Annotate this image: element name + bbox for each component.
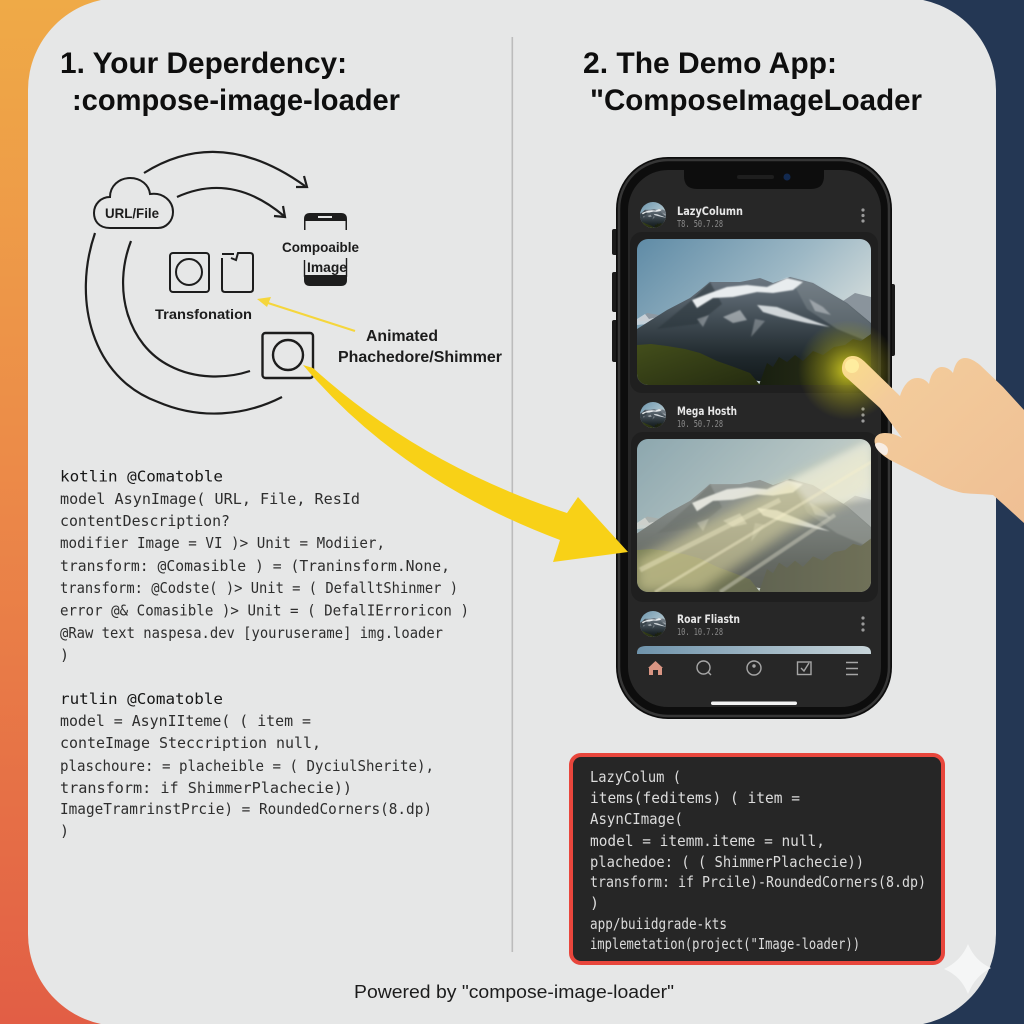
heading: the demo app: "ComposeImageLoader	[590, 84, 922, 117]
feed card 2 with shimmer	[631, 432, 878, 602]
feed row 2 header: Mega Hosth	[677, 404, 737, 418]
icon: phone composable image: Image	[307, 259, 347, 275]
arrow: big yellow	[303, 365, 628, 562]
code block: kotlin composable: modifier Image = VI )> Unit = Modiier,	[60, 534, 385, 552]
phone mockup	[612, 157, 895, 719]
icon: search	[697, 661, 711, 675]
code panel: lazy column: implemetation(project("Image-loader))	[590, 935, 860, 953]
icon: file	[222, 253, 253, 292]
icon: home	[648, 661, 663, 675]
code panel: lazy column: AsynCImage(	[590, 810, 683, 828]
code block: rutlin item: transform: if ShimmerPlachecie))	[60, 779, 352, 797]
avatar 2	[640, 402, 666, 428]
icon: check	[798, 662, 811, 674]
code block: rutlin item: model = AsynIIteme( ( item =	[60, 712, 311, 730]
code block: kotlin composable: model AsynImage( URL, File, ResId	[60, 490, 360, 508]
heading: your dependency	[60, 47, 400, 117]
icon: sparkle	[944, 944, 991, 994]
top curved arrow	[144, 152, 307, 187]
feed row 3 header: 10. 10.7.28	[677, 627, 723, 638]
inner return arc	[123, 241, 250, 376]
code panel: lazy column: LazyColum (	[590, 768, 681, 786]
code panel: lazy column: )	[590, 894, 599, 912]
code block: rutlin item: rutlin @Comatoble	[60, 690, 223, 708]
code block: rutlin item	[60, 690, 434, 840]
icon: placeholder square	[262, 333, 313, 378]
code block: kotlin composable: error @& Comasible )> Unit = ( DefalIErroricon )	[60, 602, 469, 620]
code panel: lazy column: transform: if Prcile)-RoundedCorners(8.dp)	[590, 873, 926, 891]
arrow: thin yellow	[257, 297, 355, 331]
fingertip highlight	[845, 359, 859, 373]
label: animated placeholder	[338, 328, 502, 366]
icon: phone composable image: Compoaible	[282, 239, 359, 255]
label: animated placeholder: Phachedore/Shimmer	[338, 349, 502, 366]
code block: rutlin item: conteImage Steccription null,	[60, 734, 321, 752]
code block: kotlin composable: transform: @Comasible ) = (Traninsform.None,	[60, 557, 450, 575]
label: animated placeholder: Animated	[366, 328, 438, 345]
diagram: dependency pipeline	[86, 152, 502, 414]
code block: kotlin composable: transform: @Codste( )> Unit = ( DefalltShinmer )	[60, 579, 458, 597]
feed row 1 header: LazyColumn	[677, 204, 743, 218]
icon: cloud with URL/File	[94, 178, 173, 228]
feed row 2 header	[640, 402, 865, 428]
code block: rutlin item: )	[60, 822, 69, 840]
feed row 2 header: 10. 50.7.28	[677, 419, 723, 430]
partial next image	[637, 646, 871, 654]
code block: kotlin composable: )	[60, 646, 69, 664]
phone screen	[628, 170, 881, 707]
code panel: lazy column: model = itemm.iteme = null,	[590, 832, 825, 850]
second curved arrow	[177, 188, 285, 217]
icon: cloud with URL/File: URL/File	[105, 205, 159, 221]
heading: the demo app	[583, 47, 922, 117]
tap glow	[802, 326, 890, 416]
thumb nail	[875, 443, 888, 455]
icon: compass	[747, 661, 761, 675]
code block: kotlin composable: kotlin @Comatoble	[60, 468, 223, 486]
feed card 1	[630, 232, 878, 393]
heading: your dependency: :compose-image-loader	[72, 84, 400, 117]
notch	[684, 168, 824, 189]
code block: kotlin composable	[60, 468, 469, 664]
icon: phone composable image	[282, 213, 359, 286]
label: transformation: Transfonation	[155, 306, 252, 322]
code panel: lazy column: plachedoe: ( ( ShimmerPlachecie))	[590, 853, 864, 871]
feed row 1 header	[640, 202, 865, 228]
icon: pointing hand	[842, 356, 1024, 523]
code panel: lazy column: app/buiidgrade-kts	[590, 915, 727, 933]
outer return arc	[86, 233, 282, 414]
code panel: lazy column: items(feditems) ( item =	[590, 789, 800, 807]
feed row 1 header: T8. 50.7.28	[677, 219, 723, 230]
mountain photo 2 shimmer	[637, 439, 871, 592]
center divider	[512, 37, 513, 952]
heading: your dependency: 1. Your Deperdency:	[60, 47, 347, 80]
feed row 3 header	[632, 611, 865, 638]
code block: kotlin composable: contentDescription?	[60, 512, 230, 530]
code block: rutlin item: ImageTramrinstPrcie) = RoundedCorners(8.dp)	[60, 800, 432, 818]
code block: rutlin item: plaschoure: = placheible = ( DyciulSherite),	[60, 757, 434, 775]
bottom navigation	[648, 661, 858, 675]
code panel: lazy column	[571, 755, 943, 963]
avatar 3	[640, 611, 666, 637]
home indicator	[711, 702, 797, 705]
mountain photo 1	[637, 239, 871, 385]
icon: menu	[846, 662, 858, 674]
phone body	[616, 157, 892, 719]
phone side buttons	[612, 229, 895, 362]
heading: the demo app: 2. The Demo App:	[583, 47, 837, 80]
feed row 3 header: Roar Fliastn	[677, 612, 740, 626]
code block: kotlin composable: @Raw text naspesa.dev [youruserame] img.loader	[60, 624, 443, 642]
avatar 1	[640, 202, 666, 228]
footer caption: Powered by "compose-image-loader"	[354, 982, 674, 1002]
icon: image transform square	[170, 253, 209, 292]
